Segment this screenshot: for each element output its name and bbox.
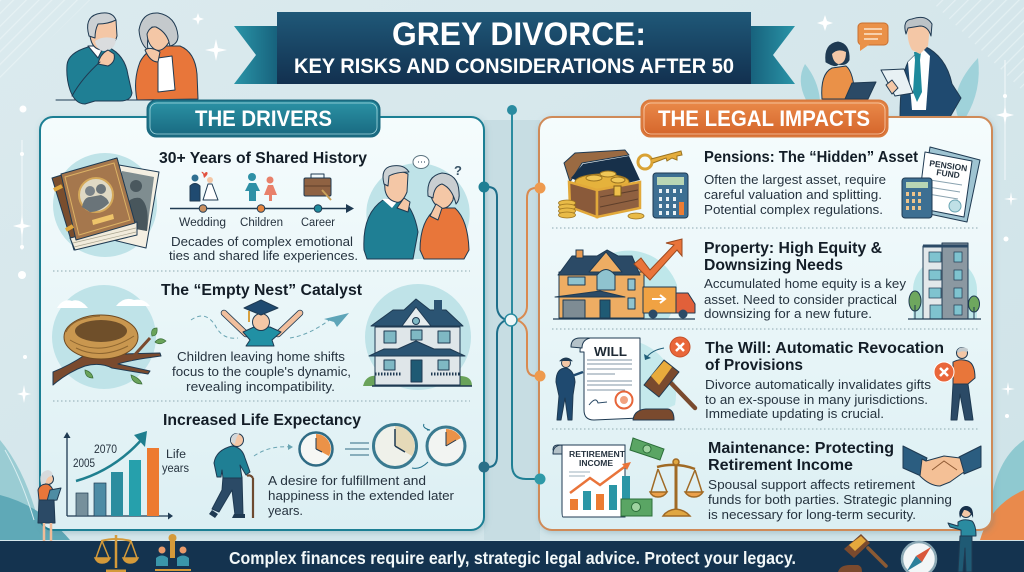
bar chart: life years: 2070: [94, 444, 117, 456]
panel: the legal impacts: [539, 100, 992, 530]
bar chart: life years: Life: [166, 449, 186, 461]
connector lines between panels: [484, 110, 540, 479]
heading: the will: of Provisions: [705, 357, 803, 374]
text: pensions body: careful valuation and splitting.: [704, 187, 882, 202]
icon: family house: [363, 284, 472, 390]
icon: handshake: [903, 446, 981, 486]
heading pill: legal impacts: THE LEGAL IMPACTS: [658, 106, 870, 131]
text: maintenance body: Spousal support affects retirement: [708, 477, 915, 492]
icon: house, rising arrow and truck: [553, 239, 695, 319]
bar chart: life years: 2005: [73, 458, 95, 470]
heading pill: the drivers: [148, 100, 380, 136]
icon: balance scale: [650, 459, 703, 516]
text: empty nest body: Children leaving home shifts: [177, 349, 346, 364]
icon: empty nest: [52, 285, 166, 389]
decorative sparkles: [13, 13, 1018, 418]
heading: property: Property: High Equity &: [704, 240, 882, 257]
text: the will body: Divorce automatically invalidates gifts: [705, 377, 932, 392]
heading pill: the drivers: THE DRIVERS: [195, 106, 332, 131]
decorative leaves bottom right: [980, 440, 1024, 540]
timeline: Children: [240, 217, 283, 229]
heading: property: Downsizing Needs: [704, 257, 843, 274]
text: property body: asset. Need to consider practical: [704, 292, 897, 307]
icon: compass: [902, 542, 936, 572]
icon: thinking couple: ?: [454, 163, 462, 178]
text: life expectancy body: years.: [268, 503, 303, 518]
icon: apartment building: [908, 243, 981, 319]
icon: album and photo: [52, 153, 159, 257]
title banner: [234, 12, 795, 84]
icon: children: [245, 173, 277, 201]
heading: maintenance: [708, 440, 894, 474]
title plate: [277, 12, 751, 84]
icon: retirement income chart: RETIREMENT: [569, 450, 625, 459]
heading: property: [704, 240, 882, 274]
icon: graduate: [191, 300, 349, 346]
icon: retirement income chart: INCOME: [579, 459, 614, 468]
icon: briefcase: [304, 174, 331, 200]
connector node: legal bottom: [534, 474, 546, 484]
text: the will body: [705, 377, 932, 421]
heading: shared history: 30+ Years of Shared History: [159, 150, 367, 167]
bar chart: life years: [64, 431, 189, 520]
icon: treasure chest, key and calculator: [558, 150, 688, 219]
subtitle: KEY RISKS AND CONSIDERATIONS AFTER 50: [294, 55, 734, 78]
text: the will body: to an ex-spouse in many jurisdictions.: [705, 392, 928, 407]
figure: woman with clipboard bottom left: [38, 470, 61, 541]
icon: thinking couple: [364, 156, 470, 259]
text: shared history body: ties and shared life experiences.: [169, 248, 358, 263]
text: empty nest body: [172, 349, 351, 394]
text: life expectancy body: happiness in the extended later: [268, 488, 455, 503]
icon: will, gavel and signatory: [556, 337, 695, 420]
icon: man with cancelled document: [934, 347, 975, 420]
icon: elderly man with cane: [209, 433, 253, 518]
icon: pension fund document: PENSION: [929, 158, 968, 173]
heading: maintenance: Retirement Income: [708, 457, 853, 474]
illustration: lawyer and client top right: [801, 17, 979, 117]
text: pensions body: Potential complex regulations.: [704, 202, 883, 217]
connector node: legal will: [534, 370, 546, 382]
icon: wedding couple: [190, 172, 218, 201]
icon: mediation figures: [155, 534, 191, 570]
timeline: Career: [301, 217, 335, 229]
heading pill: legal impacts: [642, 100, 888, 136]
panel: the drivers: [40, 100, 484, 530]
icon: retirement income chart: [553, 438, 664, 517]
text: maintenance body: [708, 477, 952, 522]
text: shared history body: Decades of complex emotional: [171, 234, 353, 249]
heading: pensions: Pensions: The “Hidden” Asset: [704, 149, 919, 166]
connector hub: [505, 314, 517, 326]
icon: scales of justice: [95, 535, 138, 571]
text: empty nest body: focus to the couple's dynamic,: [172, 364, 351, 379]
icon: pension fund document: FUND: [936, 167, 960, 180]
text: shared history body: [169, 234, 358, 263]
ribbon tail right: [750, 26, 795, 84]
connector top node: [507, 105, 517, 115]
text: empty nest body: revealing incompatibility.: [186, 379, 335, 394]
footer banner: [0, 534, 1024, 572]
heading: life expectancy: Increased Life Expectancy: [163, 412, 361, 429]
text: life expectancy body: A desire for fulfillment and: [268, 473, 426, 488]
icon: pension fund document: [902, 147, 980, 222]
icon: gavel: [838, 534, 886, 572]
bar chart: life years: years: [162, 463, 189, 475]
timeline: Wedding: [179, 217, 226, 229]
icon: clocks: [254, 424, 465, 468]
text: property body: downsizing for a new future.: [704, 306, 872, 321]
heading: maintenance: Maintenance: Protecting: [708, 440, 894, 457]
text: pensions body: Often the largest asset, require: [704, 172, 886, 187]
title: GREY DIVORCE:: [392, 16, 646, 52]
heading: empty nest: The “Empty Nest” Catalyst: [161, 282, 363, 299]
icon: will, gavel and signatory: WILL: [594, 344, 627, 359]
ribbon tail left: [234, 26, 278, 84]
text: maintenance body: is necessary for long-term security.: [708, 507, 916, 522]
connector node: legal top: [534, 182, 546, 194]
timeline: [170, 204, 354, 229]
figure: woman bottom right: [948, 506, 976, 572]
text: pensions body: [704, 172, 886, 217]
text: property body: Accumulated home equity is a key: [704, 276, 906, 291]
heading: the will: [705, 340, 944, 374]
text: life expectancy body: [268, 473, 455, 518]
footer message: Complex finances require early, strategic legal advice. Protect your legacy.: [229, 548, 796, 568]
text: property body: [704, 276, 906, 321]
connector node: drivers top: [478, 182, 490, 192]
text: the will body: Immediate updating is crucial.: [705, 406, 884, 421]
connector node: drivers bottom: [478, 462, 490, 472]
heading: the will: The Will: Automatic Revocation: [705, 340, 944, 357]
illustration: older couple top left: [56, 13, 200, 104]
text: maintenance body: funds for both parties. Strategic planning: [708, 492, 952, 507]
decorative leaves bottom left: [0, 440, 70, 540]
